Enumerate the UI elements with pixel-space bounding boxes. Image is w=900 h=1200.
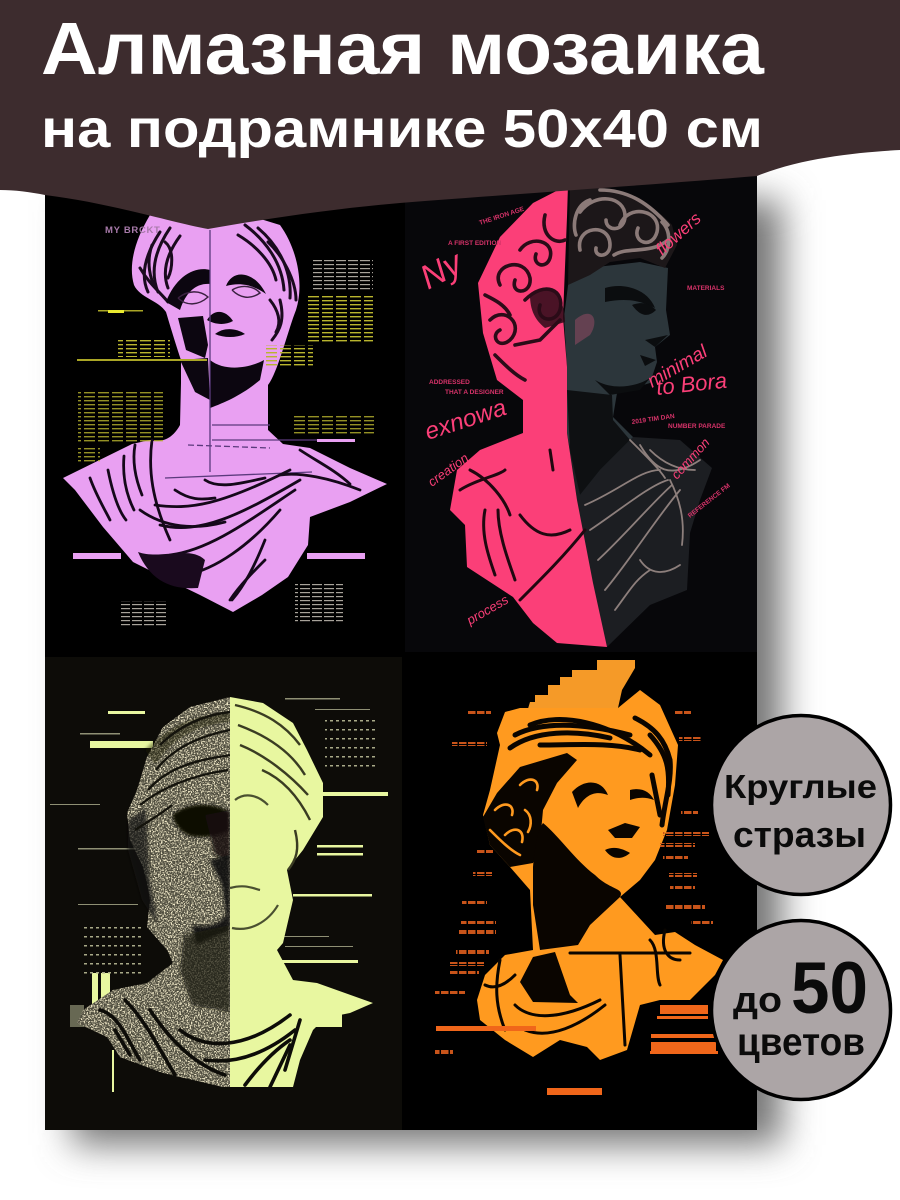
pink bars <box>73 439 365 559</box>
badge: up to 50 colours <box>712 920 890 1100</box>
drapery ink <box>485 930 690 1045</box>
panel: pink and slate bust artwork <box>414 185 732 647</box>
handwritten words: minimal <box>644 341 712 392</box>
panel: pink bust artwork <box>63 205 387 627</box>
neck shadow <box>567 390 630 495</box>
drapery folds <box>90 440 360 600</box>
badge: up to 50 colours: до <box>733 979 782 1020</box>
handwritten words <box>414 208 728 628</box>
stepped glitch crown <box>527 660 635 712</box>
small pink labels: THAT A DESIGNER <box>445 389 504 396</box>
left hair waves <box>135 712 230 830</box>
small pink labels: MATERIALS <box>687 285 725 292</box>
left grainy half <box>77 697 230 1087</box>
slate torso <box>567 433 712 647</box>
badge: round rhinestones <box>712 716 890 894</box>
title line 2: на подрамнике 50х40 см <box>41 99 763 159</box>
badge: round rhinestones: Круглые <box>724 768 877 805</box>
pink bust silhouette <box>63 205 387 612</box>
face shading <box>166 269 266 408</box>
badge: up to 50 colours: 50 <box>791 948 868 1029</box>
slate face <box>564 262 670 495</box>
right bright half <box>230 697 373 1087</box>
title line 1: Алмазная мозаика <box>41 7 765 90</box>
distressed base <box>138 552 205 588</box>
small pink labels: 2019 TIM DAN <box>631 413 676 426</box>
eye outlines <box>178 286 260 304</box>
small pink labels: NUMBER PARADE <box>668 423 726 430</box>
centre guide lines <box>165 230 345 478</box>
handwritten words: flowers <box>652 208 705 259</box>
panel: yellow and grey bust artwork <box>50 697 388 1092</box>
pink hair curls <box>485 215 565 380</box>
pink drapery folds <box>460 450 585 600</box>
handwritten words: creation <box>425 450 471 489</box>
right brow and mouth <box>230 795 278 929</box>
hair ink <box>483 753 577 867</box>
drapery shading <box>100 1000 300 1087</box>
orange bars <box>436 1005 718 1095</box>
left face shadows <box>128 712 230 1012</box>
face features <box>595 286 668 395</box>
curly hair <box>568 186 677 285</box>
handwritten words: exnowa <box>422 394 510 446</box>
orange text labels <box>435 711 713 1055</box>
canvas drop shadow <box>72 200 782 1145</box>
face features <box>533 783 654 950</box>
glitch bars <box>90 711 388 1092</box>
small pink labels: THE IRON AGE <box>478 206 526 227</box>
pink half bust <box>450 185 607 647</box>
small pink labels: REFERENCE FM <box>687 482 732 520</box>
header banner <box>0 0 900 229</box>
fine text rows <box>50 698 377 1027</box>
handwritten words: to Bora <box>655 368 728 400</box>
badge: round rhinestones: стразы <box>733 814 866 855</box>
panel: stretched canvas <box>45 165 757 1130</box>
handwritten words: process <box>463 592 511 628</box>
badge: up to 50 colours: цветов <box>737 1021 865 1064</box>
banner shape <box>0 0 900 229</box>
handwritten words: Ny <box>414 243 470 297</box>
chest cut shadow <box>520 952 578 1003</box>
hair strokes <box>140 225 296 340</box>
small pink labels: A FIRST EDITION <box>448 240 502 247</box>
slate cheek highlight <box>575 314 594 345</box>
artwork title: MY BRCKT <box>105 225 161 236</box>
orange curls on hair <box>490 780 538 855</box>
small pink labels: ADDRESSED <box>429 379 470 386</box>
panel: orange bust artwork <box>435 660 723 1095</box>
yellow text blocks <box>77 258 374 627</box>
drapery lines <box>585 440 700 610</box>
small pink labels <box>429 206 732 520</box>
orange bust silhouette <box>477 690 723 1060</box>
handwritten words: common <box>668 435 713 482</box>
right hair waves <box>235 705 310 870</box>
